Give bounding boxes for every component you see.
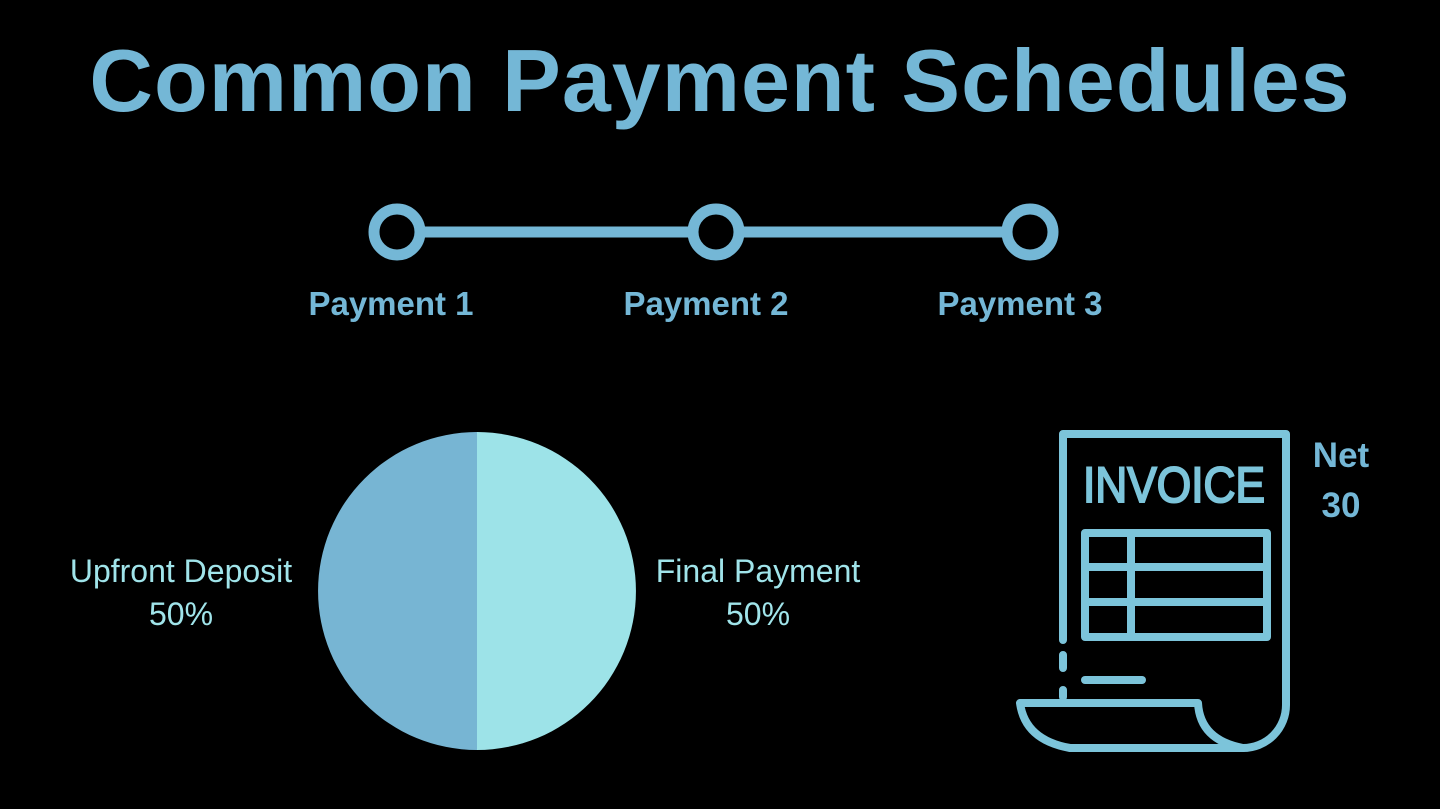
label: final payment: 50% xyxy=(726,596,790,632)
label: net 30: 30 xyxy=(1322,486,1360,525)
pie chart xyxy=(318,432,636,750)
label: upfront deposit: Upfront Deposit xyxy=(70,553,292,589)
label: payment 2: Payment 2 xyxy=(623,285,789,322)
label: upfront deposit xyxy=(70,553,292,632)
node: payment 3 xyxy=(1007,209,1053,255)
label: payment 1: Payment 1 xyxy=(308,285,474,322)
icon: invoice: INVOICE xyxy=(1083,457,1265,513)
label: upfront deposit: 50% xyxy=(149,596,213,632)
label: net 30: Net xyxy=(1313,436,1369,475)
label: final payment xyxy=(656,553,860,632)
label: net 30 xyxy=(1313,436,1369,525)
label: payment 3: Payment 3 xyxy=(937,285,1103,322)
node: payment 1 xyxy=(374,209,420,255)
title: Common Payment Schedules xyxy=(89,31,1351,130)
label: final payment: Final Payment xyxy=(656,553,860,589)
node: payment 2 xyxy=(693,209,739,255)
